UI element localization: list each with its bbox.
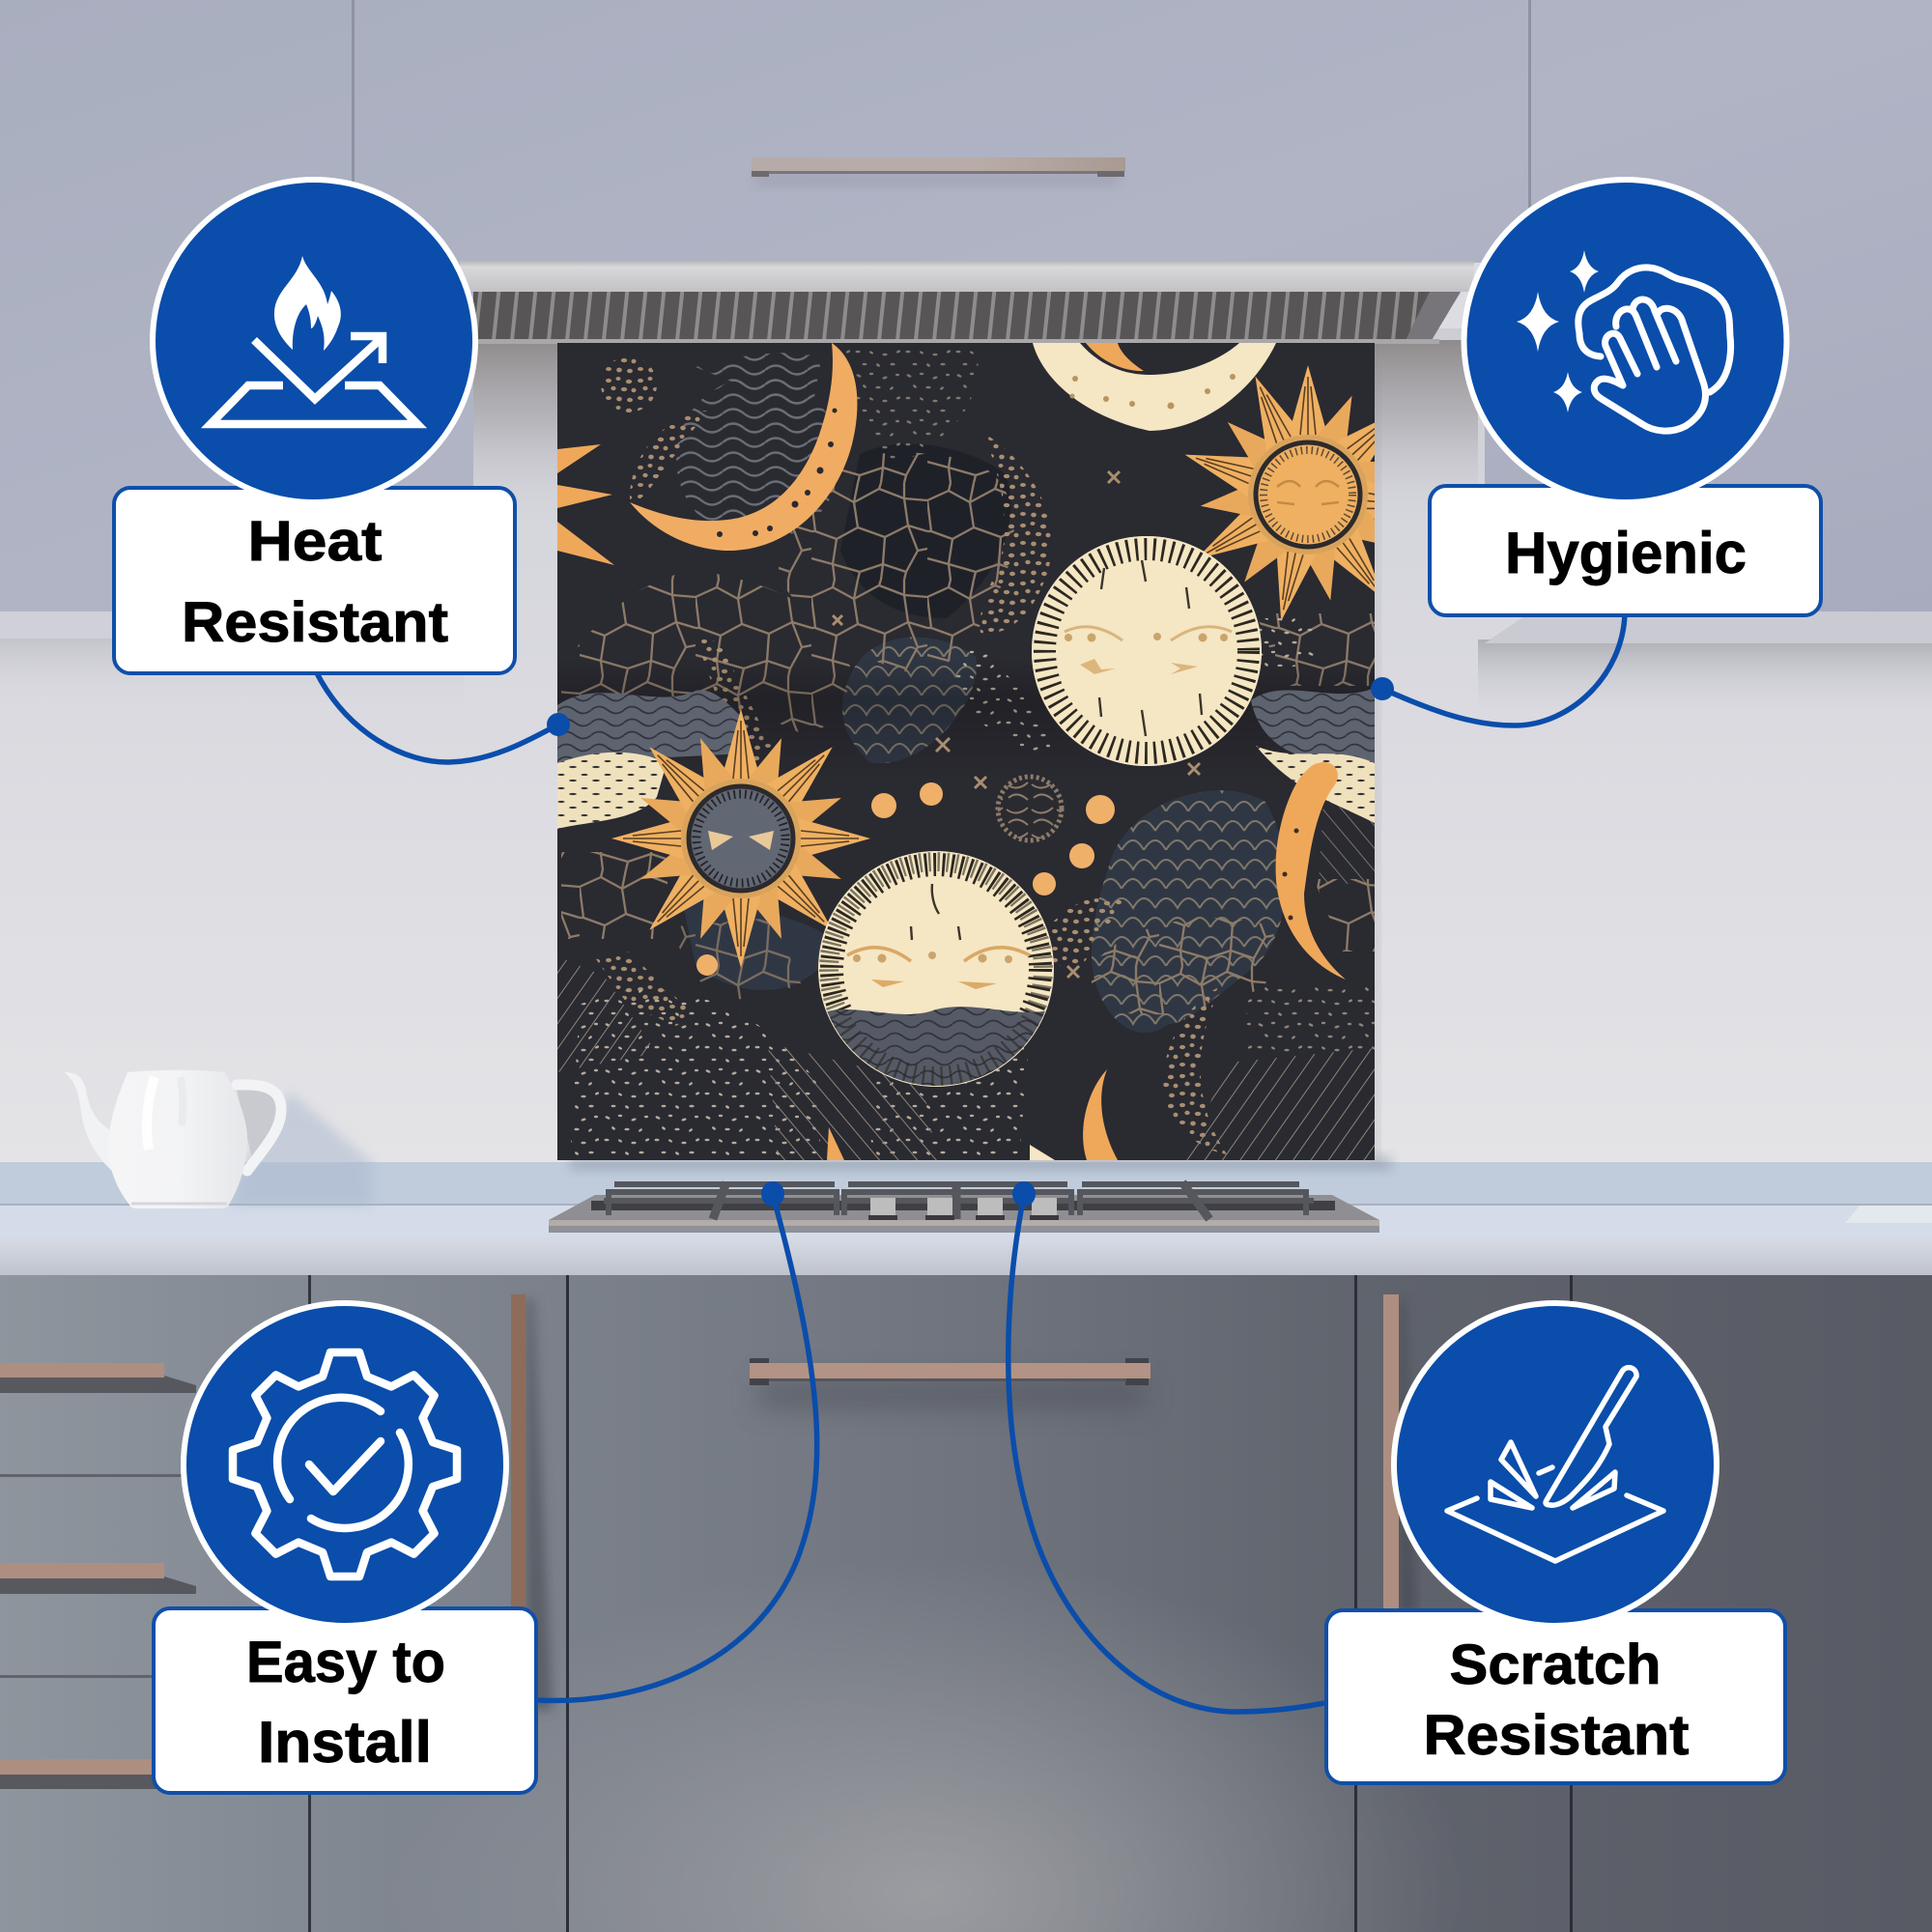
wave band left: [557, 690, 744, 829]
sun left: [611, 709, 870, 968]
hatched fans: [557, 802, 1375, 1160]
fine dot fields: [570, 618, 1375, 1159]
lower cabinets: [0, 1275, 1932, 1932]
label box: [114, 488, 515, 673]
label box: [1430, 486, 1821, 615]
heading: [182, 510, 448, 654]
orange dots: [696, 782, 1115, 976]
wavy globe: [676, 377, 840, 541]
connector: scratch resistant: [1009, 1181, 1324, 1712]
star sparkles: [833, 471, 1200, 978]
splashback panel: celestial artwork: [557, 343, 1439, 1160]
label box: [1326, 1610, 1785, 1783]
callout: scratch resistant: [1326, 1303, 1785, 1783]
heading: Resistant: [182, 591, 448, 654]
wall: [0, 328, 1932, 1169]
moon face lower: [818, 851, 1054, 1092]
teapot: [65, 1070, 372, 1208]
control knobs: [868, 1198, 1059, 1220]
heading: [246, 1630, 445, 1775]
moon face upper: [1032, 536, 1262, 766]
splashback drop shadow: [570, 1156, 1391, 1170]
net texture: [561, 452, 1375, 1014]
cream crescent: [1033, 343, 1276, 431]
extractor hood: [460, 261, 1474, 344]
heading: Resistant: [1424, 1704, 1689, 1767]
callout: hygienic: [1430, 180, 1821, 615]
orange crescent: [630, 343, 857, 551]
icon circle: [1394, 1303, 1717, 1626]
right orange crescent: [1276, 762, 1346, 980]
label box: [154, 1608, 536, 1793]
cabinet handle: [752, 157, 1125, 185]
icon: flame on surface with deflecting arrow: [211, 256, 417, 424]
counter: [0, 1162, 1932, 1275]
glass reflections: [557, 667, 1370, 760]
callout: easy to install: [154, 1303, 536, 1793]
heading: Easy to: [246, 1630, 445, 1694]
cabinet under-lip left: [0, 611, 483, 639]
heading: [1424, 1634, 1689, 1767]
heading: Heat: [247, 510, 383, 573]
lower cabinet handles: [0, 1294, 1416, 1789]
connector: heat resistant: [316, 671, 570, 762]
connector: hygienic: [1371, 613, 1625, 725]
heading: Scratch: [1449, 1634, 1662, 1696]
wave band right: [1251, 688, 1375, 823]
cooktop: [549, 1182, 1379, 1233]
sun upper right: [1184, 365, 1375, 621]
heading: Hygienic: [1505, 521, 1747, 585]
icon: hand wiping with sparkles: [1517, 250, 1731, 431]
bottom crescents: [827, 1069, 1118, 1160]
icon circle: [153, 180, 475, 502]
texture medallions: [601, 356, 657, 412]
scale outlines on blobs: [1092, 790, 1286, 1033]
dark blue blobs: [676, 444, 1286, 1033]
upper cabinets: [0, 0, 1932, 611]
connector: easy to install: [538, 1181, 817, 1700]
icon: knife scratching surface: [1447, 1368, 1663, 1561]
heading: Install: [258, 1710, 432, 1775]
icon circle: [184, 1303, 506, 1626]
tan dotted streaks: [594, 411, 1227, 1154]
burner grates: [604, 1182, 1314, 1219]
cabinet under-lip right: [1485, 611, 1932, 643]
icon circle: [1464, 180, 1787, 502]
callout: heat resistant: [114, 180, 515, 673]
icon: gear with check mark: [233, 1352, 457, 1577]
partial sun left edge: [557, 444, 614, 565]
